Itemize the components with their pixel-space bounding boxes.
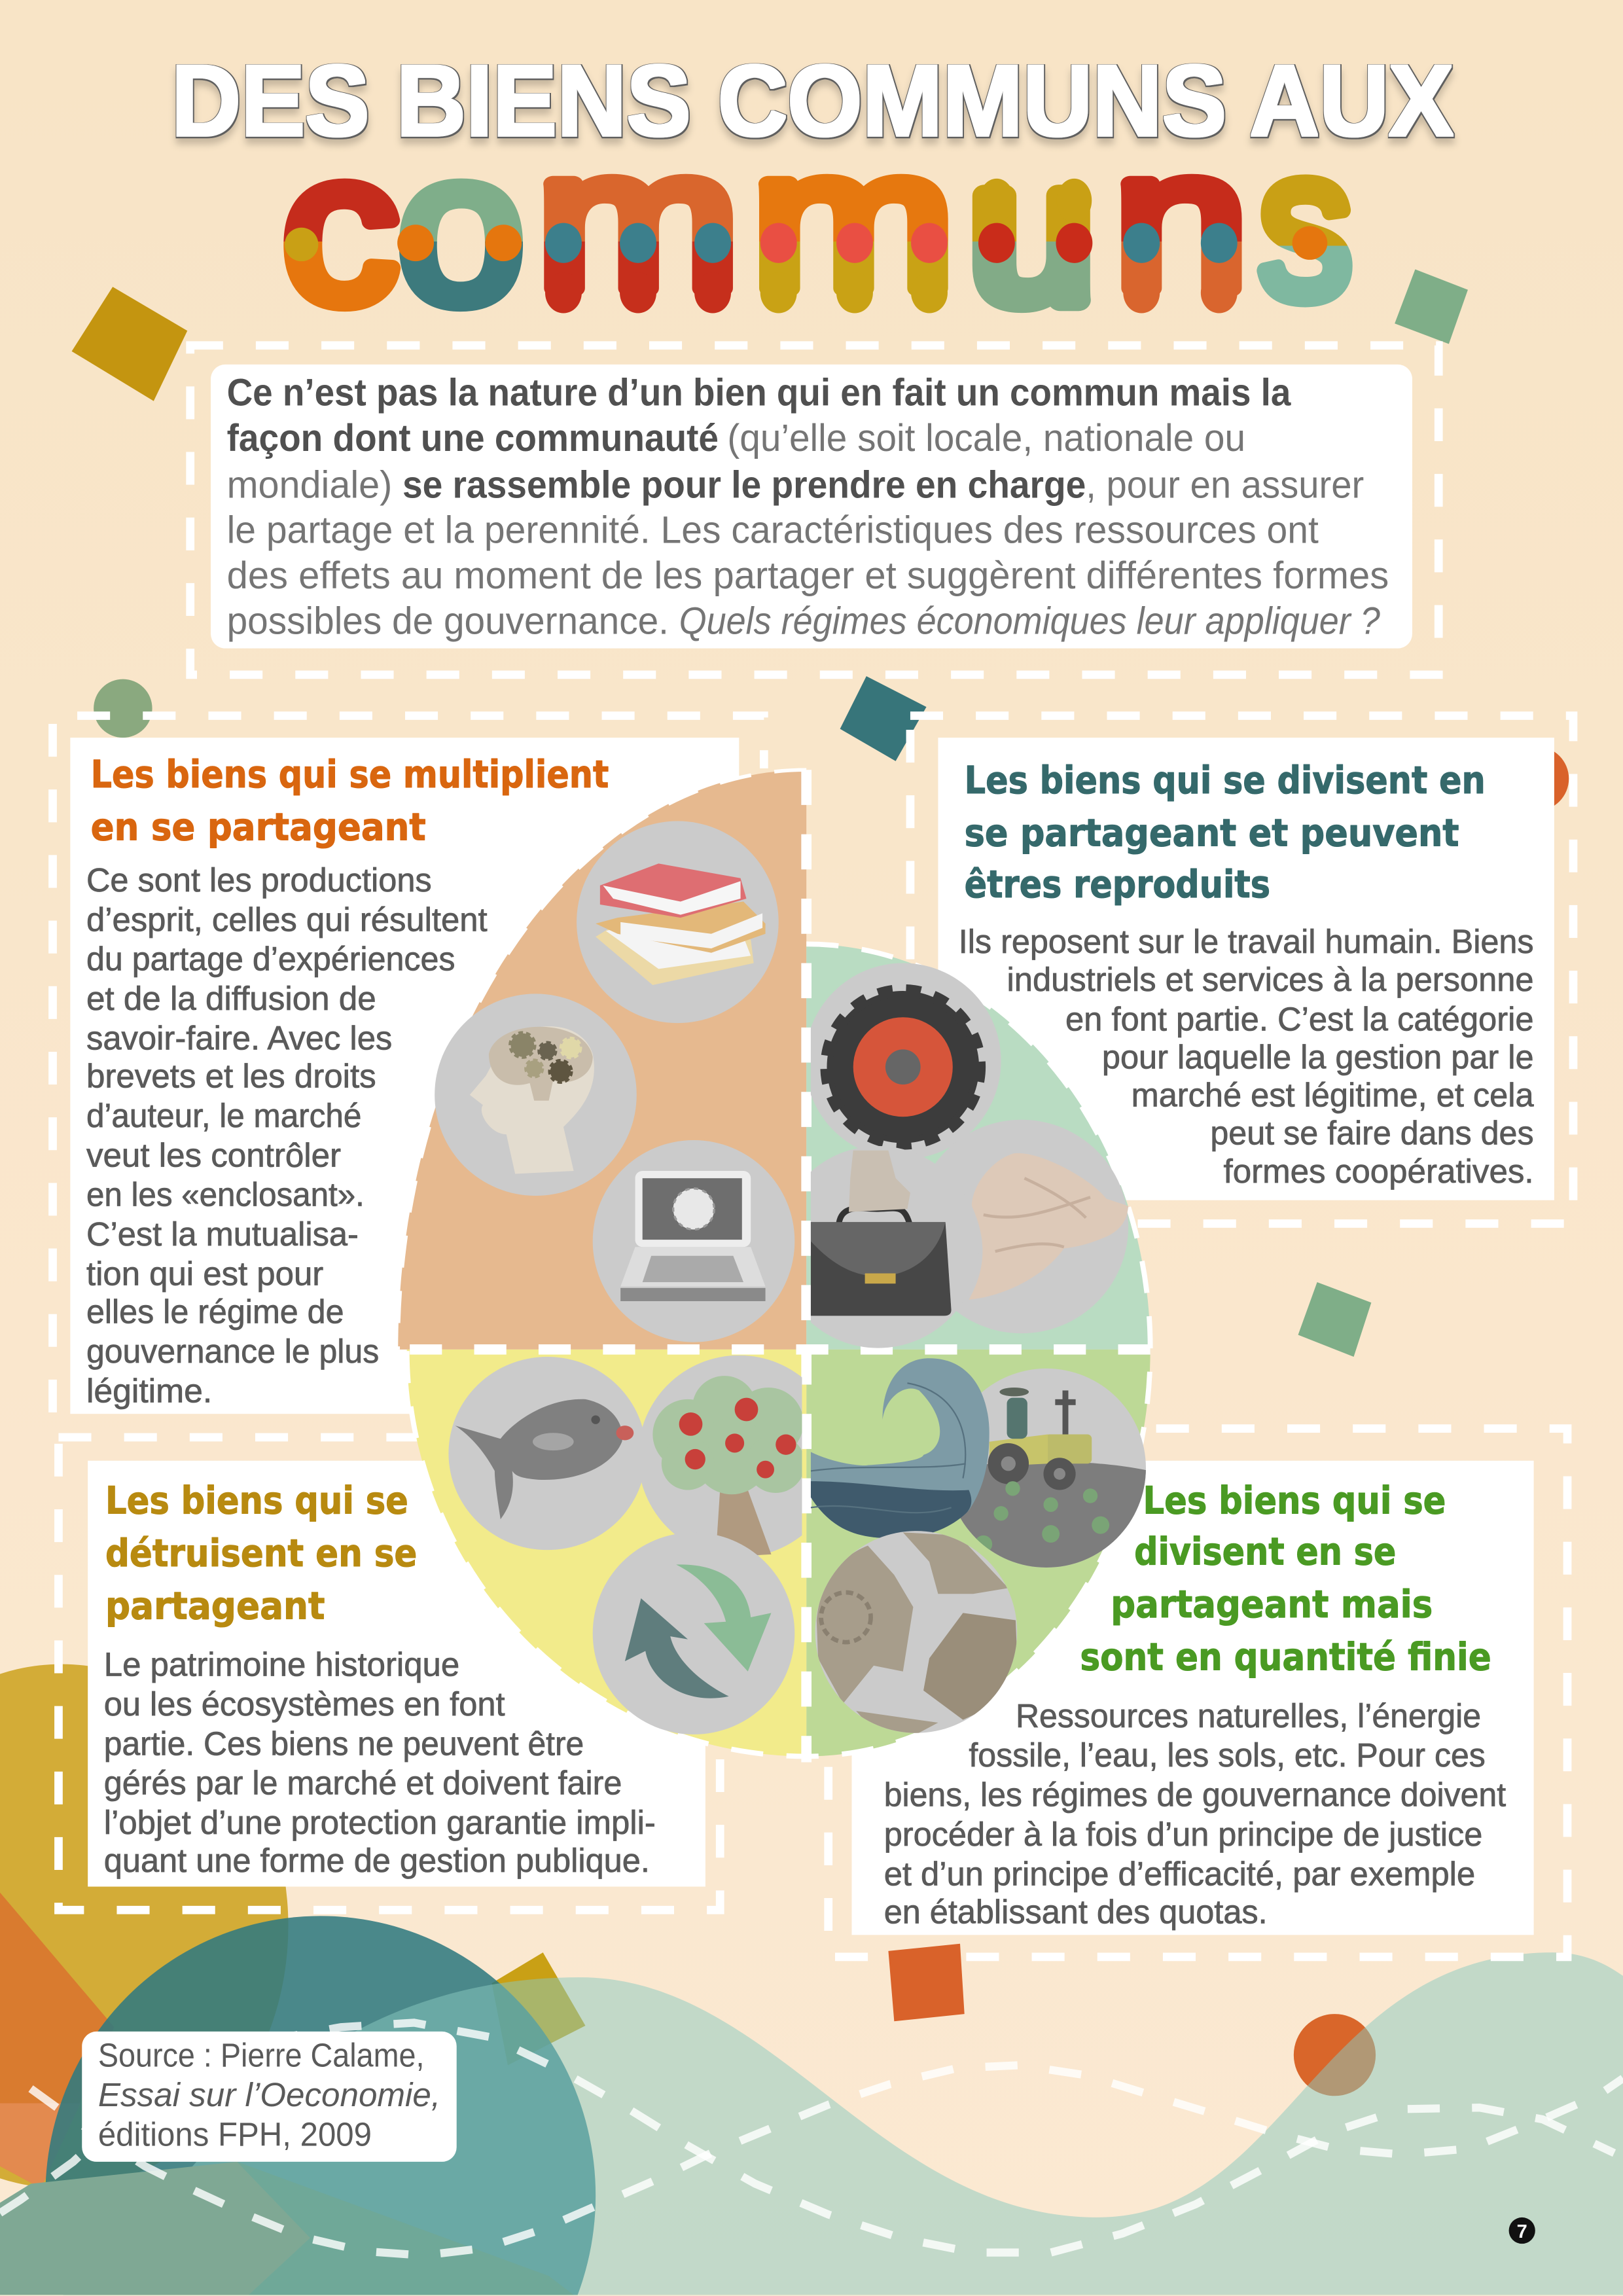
- icon: apple tree: [641, 1355, 802, 1555]
- coloured word: communs: n: [1115, 110, 1247, 331]
- text: quantité finie: fossile, l’eau, les sols, etc. Pour ces: [969, 1736, 1486, 1774]
- panel background: top left: [70, 738, 739, 1414]
- text: multiplient: gouvernance le plus: [86, 1332, 379, 1370]
- text: reproduits: pour laquelle la gestion par le: [1102, 1037, 1534, 1075]
- panel frame: bottom left: [58, 1437, 720, 1910]
- icon: tractor field: [961, 1368, 1146, 1568]
- decorative square: green right: [1298, 1282, 1371, 1357]
- coloured word: communs: m: [537, 110, 739, 331]
- coloured word: communs: u: [971, 121, 1093, 342]
- panel: intro: possibles de gouvernance.: [227, 600, 669, 642]
- heading: quantité finie: sont en quantité finie: [1080, 1635, 1491, 1679]
- heading: reproduits: se partageant et peuvent: [965, 811, 1459, 855]
- text: multiplient: et de la diffusion de: [86, 979, 376, 1017]
- source box: [82, 2032, 457, 2162]
- source box: Source : Pierre Calame,: [98, 2036, 425, 2074]
- icon: laptop: [593, 1140, 794, 1342]
- panel: intro: , pour en assurer: [1086, 463, 1364, 506]
- decorative square: mustard: [72, 287, 187, 401]
- text: quantité finie: en établissant des quotas.: [884, 1892, 1268, 1930]
- text: multiplient: en les «enclosant».: [86, 1175, 365, 1213]
- panel frame: top left: [53, 716, 764, 1412]
- text: détruisent: [104, 1645, 656, 1879]
- decorative square: green top right: [1395, 269, 1468, 344]
- text: quantité finie: procéder à la fois d’un principe de justice: [884, 1815, 1482, 1853]
- text: détruisent: ou les écosystèmes en font: [104, 1685, 505, 1723]
- heading: reproduits: Les biens qui se divisent en: [965, 758, 1486, 802]
- text: multiplient: d’esprit, celles qui résultent: [86, 900, 488, 938]
- text: multiplient: Ce sont les productions: [86, 861, 432, 899]
- text: multiplient: du partage d’expériences: [86, 940, 455, 978]
- heading: reproduits: êtres reproduits: [965, 862, 1270, 906]
- heading: détruisent: détruisent en se: [105, 1531, 417, 1575]
- panel: biens qui se multiplient: [86, 752, 609, 1409]
- panel background: bottom left: [88, 1461, 705, 1887]
- text: quantité finie: [884, 1696, 1506, 1930]
- panel: biens qui se divisent et peuvent être reproduits: [959, 758, 1534, 1190]
- coloured word: communs: m: [752, 110, 954, 331]
- heading: reproduits: [965, 758, 1486, 906]
- icon: briefcase: [810, 1146, 956, 1348]
- heading: quantité finie: Les biens qui se: [1143, 1478, 1446, 1522]
- heading: multiplient: [91, 752, 609, 850]
- icon: rocks and fossils: [815, 1531, 1017, 1736]
- text: détruisent: l’objet d’une protection garantie impli-: [104, 1803, 656, 1841]
- text: quantité finie: biens, les régimes de gouvernance doivent: [884, 1776, 1506, 1814]
- source box: Essai sur l’Oeconomie,: [98, 2075, 440, 2113]
- panel: intro: [190, 346, 1438, 675]
- text: détruisent: quant une forme de gestion publique.: [104, 1841, 650, 1879]
- icon: hands: [915, 1120, 1128, 1333]
- text: multiplient: [86, 861, 488, 1409]
- text: multiplient: elles le régime de: [86, 1293, 344, 1331]
- panel: intro: façon dont une communauté: [227, 417, 719, 459]
- icon: books: [577, 821, 779, 1023]
- panel frame: top right: [910, 716, 1573, 1224]
- panel: intro: (qu’elle soit locale, nationale ou: [727, 417, 1245, 459]
- panel: intro: mondiale): [227, 463, 392, 506]
- text: détruisent: gérés par le marché et doivent faire: [104, 1764, 622, 1802]
- panel: biens qui se détruisent: [104, 1478, 656, 1879]
- heading: détruisent: partageant: [105, 1583, 325, 1628]
- text: détruisent: partie. Ces biens ne peuvent être: [104, 1724, 584, 1762]
- text: reproduits: [959, 922, 1534, 1190]
- panel background: top right: [938, 738, 1554, 1200]
- heading: détruisent: [105, 1478, 417, 1628]
- heading: détruisent: Les biens qui se: [105, 1478, 408, 1522]
- panel: intro: se rassemble pour le prendre en charge: [402, 463, 1086, 506]
- title: DES BIENS COMMUNS AUX: [171, 44, 1454, 157]
- text: reproduits: peut se faire dans des: [1210, 1114, 1534, 1152]
- panel background: bottom right: [851, 1461, 1534, 1935]
- coloured word: communs: [283, 104, 1352, 348]
- decorative square: orange: [888, 1944, 965, 2021]
- heading: multiplient: en se partageant: [91, 805, 426, 850]
- heading: quantité finie: partageant mais: [1111, 1582, 1433, 1626]
- heading: multiplient: Les biens qui se multiplient: [91, 752, 609, 797]
- text: multiplient: d’auteur, le marché: [86, 1096, 361, 1134]
- decorative circle: orange: [1505, 746, 1569, 811]
- text: multiplient: C’est la mutualisa-: [86, 1215, 359, 1253]
- coloured word: communs: c: [283, 109, 398, 348]
- bottom decorative landscape: [0, 1664, 1623, 2295]
- panel frame: bottom right: [829, 1429, 1567, 1957]
- page number: 7: [1517, 2221, 1527, 2242]
- text: reproduits: industriels et services à la personne: [1007, 960, 1534, 998]
- icon: head with gears: [435, 994, 637, 1196]
- coloured word: communs: o: [398, 109, 524, 348]
- icon: fish: [448, 1357, 646, 1550]
- text: reproduits: marché est légitime, et cela: [1132, 1076, 1534, 1114]
- text: multiplient: veut les contrôler: [86, 1136, 341, 1174]
- decorative circle: green: [94, 679, 152, 738]
- text: reproduits: en font partie. C’est la catégorie: [1065, 999, 1534, 1037]
- icon: tyre: [805, 963, 1001, 1159]
- text: quantité finie: Ressources naturelles, l’énergie: [1016, 1696, 1481, 1734]
- coloured word: communs: s: [1258, 104, 1352, 343]
- panel: intro: Quels régimes économiques leur appliquer ?: [679, 600, 1380, 642]
- pie chart quadrants: [398, 770, 1156, 1762]
- text: multiplient: légitime.: [86, 1371, 212, 1409]
- source box: éditions FPH, 2009: [98, 2115, 372, 2153]
- icon: recycling arrows: [593, 1532, 794, 1734]
- text: multiplient: brevets et les droits: [86, 1057, 376, 1095]
- text: reproduits: Ils reposent sur le travail humain. Biens: [959, 922, 1534, 960]
- panel: biens en quantité finie: [884, 1478, 1506, 1930]
- panel: intro: le partage et la perennité. Les caractéristiques des ressources ont: [227, 509, 1319, 552]
- text: reproduits: formes coopératives.: [1224, 1152, 1534, 1190]
- text: détruisent: Le patrimoine historique: [104, 1645, 459, 1683]
- text: multiplient: savoir-faire. Avec les: [86, 1018, 392, 1056]
- text: quantité finie: et d’un principe d’efficacité, par exemple: [884, 1854, 1475, 1892]
- panel: intro: Ce n’est pas la nature d’un bien qui en fait un commun mais la: [227, 371, 1291, 414]
- text: multiplient: tion qui est pour: [86, 1254, 323, 1292]
- icon: wave: [811, 1358, 990, 1538]
- heading: quantité finie: [1080, 1478, 1491, 1679]
- page number: [1509, 2217, 1535, 2244]
- heading: quantité finie: divisent en se: [1134, 1530, 1396, 1574]
- panel: intro: des effets au moment de les partager et suggèrent différentes formes: [227, 554, 1389, 597]
- decorative square: teal: [840, 676, 927, 761]
